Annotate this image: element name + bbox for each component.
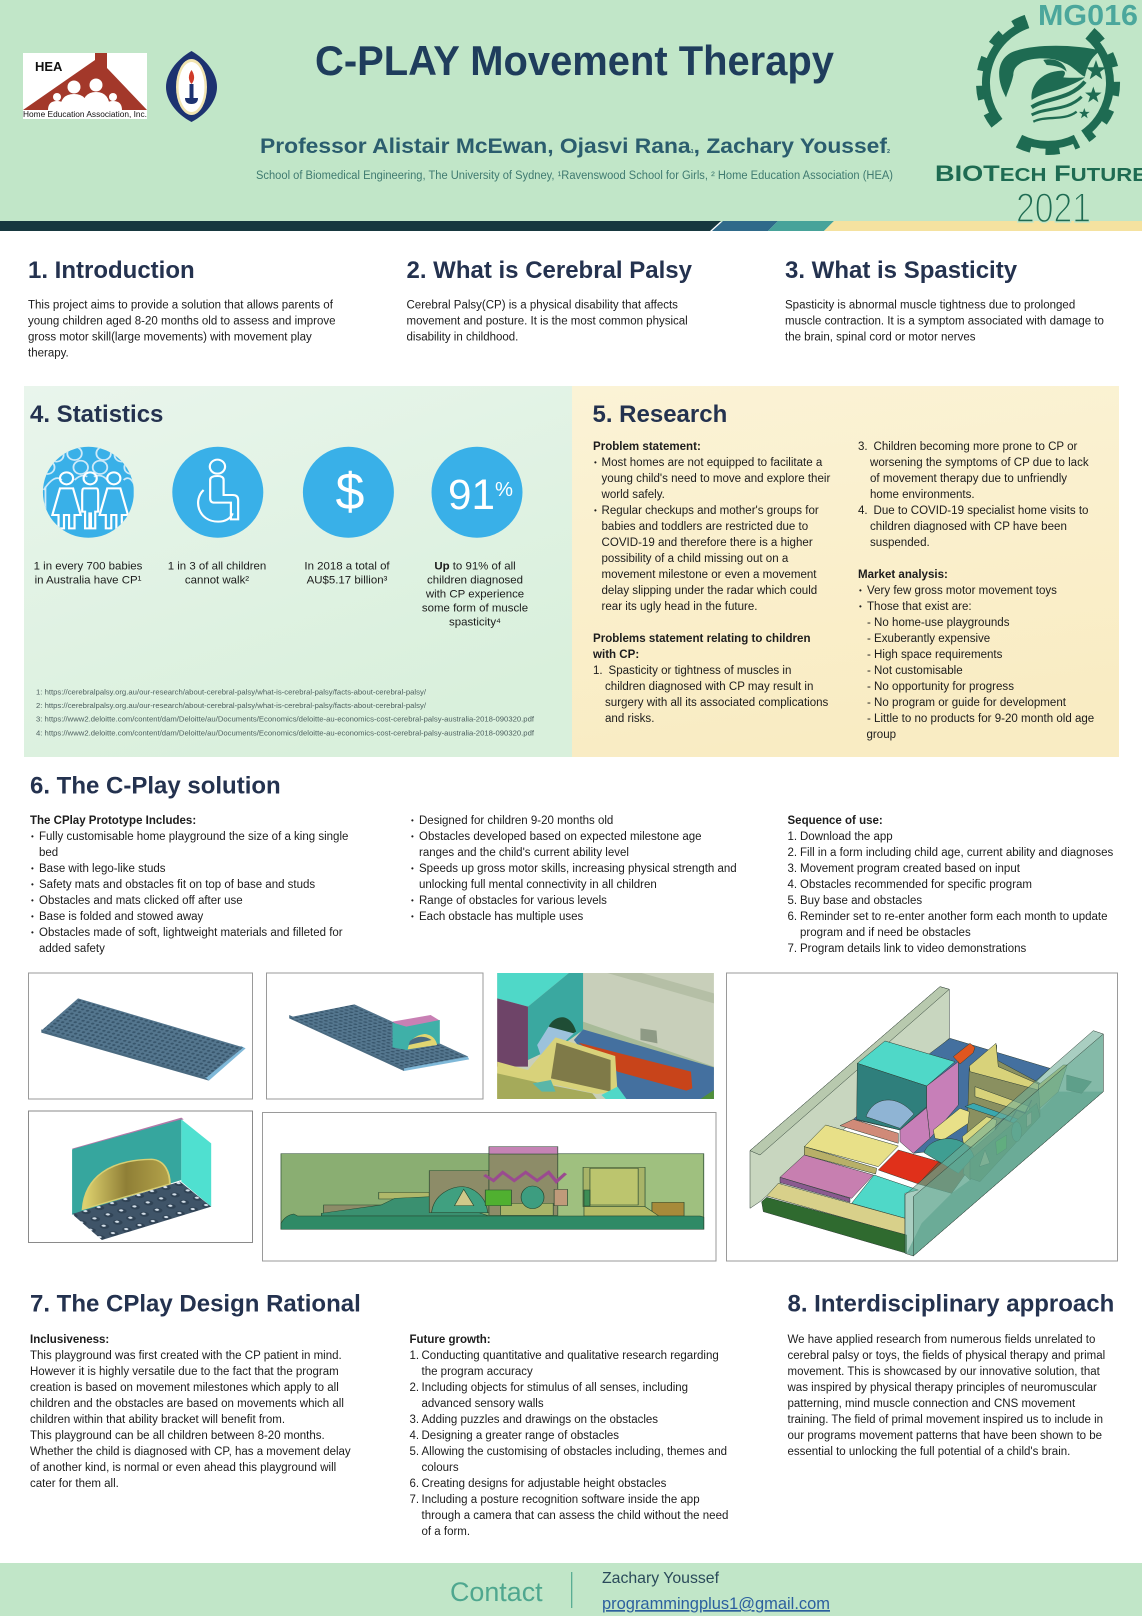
problem statement: Most homes are not equipped to facilitate a <box>602 457 823 469</box>
prototype list: • <box>31 864 34 873</box>
panel: introduction <box>28 257 336 360</box>
design list: Range of obstacles for various levels <box>419 895 607 907</box>
problem statement: world safely. <box>600 489 665 501</box>
text block: our programs movement patterns that have been shown to be <box>788 1430 1102 1442</box>
sequence of use: Download the app <box>800 831 893 843</box>
icon: dollar <box>303 447 394 586</box>
prototype list: added safety <box>39 943 105 955</box>
problems relating to children with CP <box>592 633 829 725</box>
future growth: Including a posture recognition software inside the app <box>422 1494 700 1506</box>
prototype list: Obstacles made of soft, lightweight materials and filleted for <box>39 927 343 939</box>
figure: obstacle underside <box>28 1111 252 1242</box>
panel: statistics <box>24 386 572 757</box>
problem statement: • <box>594 458 597 467</box>
text block: Cerebral Palsy(CP) is a physical disability that affects <box>406 300 678 312</box>
caption: Up to 91% of all <box>434 560 516 572</box>
authors: Professor Alistair McEwan, Ojasvi Rana 1, Zachary Youssef 2 <box>260 135 890 158</box>
inclusiveness: children and the obstacles are based on movements which all <box>30 1398 344 1410</box>
prototype list: • <box>31 880 34 889</box>
text block <box>28 300 336 360</box>
market analysis: - Not customisable <box>867 665 963 677</box>
logo: school crest <box>166 51 217 122</box>
text block: training. The field of primal movement inspired us to include in <box>788 1414 1103 1426</box>
panel: what is cerebral palsy <box>406 257 693 344</box>
references <box>36 690 534 738</box>
problems relating to children with CP: children diagnosed with CP may result in <box>605 681 813 693</box>
design list: • <box>411 864 414 873</box>
text block: Spasticity is abnormal muscle tightness due to prolonged <box>785 300 1075 312</box>
design list: Obstacles developed based on expected milestone age <box>419 831 702 843</box>
prototype list: Obstacles and mats clicked off after use <box>39 895 243 907</box>
caption: with CP experience <box>425 588 524 600</box>
market analysis: • <box>859 602 862 611</box>
logo: Home Education Association: HEA <box>35 59 63 74</box>
future growth: through a camera that can assess the child without the need <box>422 1510 728 1522</box>
design list: Designed for children 9-20 months old <box>419 815 613 827</box>
prototype list: • <box>31 912 34 921</box>
sequence of use: 5. <box>788 895 797 907</box>
problem statement: babies and toddlers are restricted due to <box>602 521 808 533</box>
inclusiveness: of another kind, is normal or even ahead this playground will <box>30 1462 336 1474</box>
market analysis: Very few gross motor movement toys <box>867 585 1057 597</box>
inclusiveness: This playground can be all children between 8-20 months. <box>30 1430 325 1442</box>
text block <box>786 1334 1105 1458</box>
heading: 4. Statistics <box>30 401 163 428</box>
caption <box>304 560 390 586</box>
sequence of use: Fill in a form including child age, current ability and diagnoses <box>800 847 1113 859</box>
market analysis: group <box>866 729 896 741</box>
text block: cerebral palsy or toys, the fields of physical therapy and primal <box>788 1350 1105 1362</box>
text block: young children aged 8-20 months old to assess and improve <box>28 316 336 328</box>
sequence of use: Buy base and obstacles <box>800 895 922 907</box>
sequence of use: Sequence of use: <box>788 815 883 827</box>
panel: the C-Play solution <box>30 772 1113 955</box>
heading: 3. What is Spasticity <box>785 257 1018 284</box>
problems continued: home environments. <box>870 489 975 501</box>
market analysis: Those that exist are: <box>867 601 972 613</box>
caption: AU$5.17 billion³ <box>307 574 388 586</box>
caption: in Australia have CP¹ <box>35 574 142 586</box>
problems relating to children with CP: Problems statement relating to children <box>593 633 811 645</box>
problem statement: Regular checkups and mother's groups for <box>602 505 819 517</box>
heading: 5. Research <box>592 401 727 428</box>
figure: full playground isometric view <box>726 973 1118 1261</box>
icon: dollar: $ <box>336 463 365 521</box>
future growth <box>410 1334 728 1538</box>
problem statement <box>593 441 830 613</box>
sequence of use: Reminder set to re-enter another form each month to update <box>800 911 1107 923</box>
sequence of use: 4. <box>788 879 797 891</box>
future growth: of a form. <box>422 1526 470 1538</box>
references: 4: https://www2.deloitte.com/content/dam/Deloitte/au/Documents/Economics/deloitte-au-economics-cost-cerebral-palsy-australia-2018-090320.pdf <box>36 730 534 738</box>
contact email: programmingplus1@gmail.com <box>602 1594 830 1613</box>
design list: • <box>411 896 414 905</box>
text block: the brain, spinal cord or motor nerves <box>785 332 976 344</box>
market analysis: Market analysis: <box>858 569 948 581</box>
caption: In 2018 a total of <box>304 560 390 572</box>
problem statement: movement milestone or even a movement <box>602 569 817 581</box>
problems continued <box>858 441 1089 549</box>
future growth: Conducting quantitative and qualitative research regarding <box>422 1350 719 1362</box>
sequence of use: 3. <box>788 863 797 875</box>
problems relating to children with CP: 1. <box>593 665 603 677</box>
problem statement: COVID-19 and therefore there is a higher <box>602 537 813 549</box>
caption: 1 in every 700 babies <box>34 560 143 572</box>
problem statement: • <box>594 506 597 515</box>
design list: Each obstacle has multiple uses <box>419 911 584 923</box>
icon: crowd of people <box>34 447 143 586</box>
problems continued: of movement therapy due to unfriendly <box>870 473 1067 485</box>
problem statement: Problem statement: <box>593 441 701 453</box>
figure: studded base <box>28 973 252 1099</box>
contact footer <box>0 1563 1142 1616</box>
market analysis: - Little to no products for 9-20 month old age <box>867 713 1094 725</box>
icon: wheelchair <box>168 447 266 586</box>
logo: BIOTech Future 2021 <box>935 0 1142 231</box>
caption: some form of muscle <box>422 602 528 614</box>
text block: was inspired by physical therapy principles of neuromuscular <box>786 1382 1097 1394</box>
caption: cannot walk² <box>185 574 249 586</box>
problems continued: Due to COVID-19 specialist home visits to <box>874 505 1088 517</box>
problems continued: 3. <box>858 441 868 453</box>
contact label: Contact <box>450 1577 543 1607</box>
sequence of use: Obstacles recommended for specific program <box>800 879 1032 891</box>
problems continued: 4. <box>858 505 868 517</box>
prototype list: Safety mats and obstacles fit on top of base and studs <box>39 879 315 891</box>
panel: research <box>572 386 1119 757</box>
text block: disability in childhood. <box>406 332 518 344</box>
text block: gross motor skill(large movements) with movement play <box>28 332 312 344</box>
contact name: Zachary Youssef <box>602 1570 720 1587</box>
sequence of use: 6. <box>788 911 797 923</box>
prototype list: • <box>31 832 34 841</box>
text block <box>785 300 1104 344</box>
design list: • <box>411 816 414 825</box>
caption: children diagnosed <box>427 574 523 586</box>
future growth: 1. <box>410 1350 419 1362</box>
future growth: the program accuracy <box>422 1366 533 1378</box>
prototype list: bed <box>39 847 58 859</box>
prototype list <box>30 815 348 955</box>
references: 3: https://www2.deloitte.com/content/dam/Deloitte/au/Documents/Economics/deloitte-au-economics-cost-cerebral-palsy-australia-2018-090320.pdf <box>36 716 534 724</box>
future growth: 2. <box>410 1382 419 1394</box>
future growth: 6. <box>410 1478 419 1490</box>
prototype list: Fully customisable home playground the size of a king single <box>39 831 348 843</box>
market analysis: - No home-use playgrounds <box>867 617 1010 629</box>
problem statement: young child's need to move and explore their <box>602 473 830 485</box>
future growth: Creating designs for adjustable height obstacles <box>422 1478 667 1490</box>
problem statement: rear its ugly head in the future. <box>602 601 757 613</box>
prototype list: Base with lego-like studs <box>39 863 166 875</box>
design list <box>411 815 737 923</box>
icon: 91 percent: % <box>495 479 513 501</box>
booth number: MG016 <box>1038 0 1138 32</box>
problems relating to children with CP: and risks. <box>605 713 654 725</box>
future growth: Future growth: <box>410 1334 491 1346</box>
future growth: colours <box>422 1462 459 1474</box>
market analysis <box>858 569 1094 741</box>
figure: close-up of obstacles <box>497 973 714 1099</box>
problems continued: Children becoming more prone to CP or <box>874 441 1078 453</box>
text block: essential to unlocking the full potential of a child's brain. <box>788 1446 1070 1458</box>
heading: 1. Introduction <box>28 257 195 284</box>
prototype list: Base is folded and stowed away <box>39 911 204 923</box>
design list: unlocking full mental connectivity in all children <box>419 879 657 891</box>
heading: 2. What is Cerebral Palsy <box>406 257 693 284</box>
panel: interdisciplinary approach <box>786 1291 1114 1458</box>
figure: side view of playground <box>262 1112 716 1261</box>
problems relating to children with CP: with CP: <box>592 649 639 661</box>
design list: Speeds up gross motor skills, increasing physical strength and <box>419 863 737 875</box>
sequence of use: 2. <box>788 847 797 859</box>
sequence of use: Movement program created based on input <box>800 863 1021 875</box>
market analysis: - Exuberantly expensive <box>867 633 990 645</box>
inclusiveness: Inclusiveness: <box>30 1334 109 1346</box>
heading: 7. The CPlay Design Rational <box>30 1291 361 1318</box>
icon: 91 percent: 91 <box>448 471 495 519</box>
inclusiveness: cater for them all. <box>30 1478 119 1490</box>
future growth: Designing a greater range of obstacles <box>422 1430 619 1442</box>
problems continued: worsening the symptoms of CP due to lack <box>869 457 1089 469</box>
problem statement: possibility of a child missing out on a <box>602 553 789 565</box>
design list: • <box>411 832 414 841</box>
problems continued: children diagnosed with CP have been <box>870 521 1067 533</box>
inclusiveness: This playground was first created with the CP patient in mind. <box>30 1350 342 1362</box>
future growth: 5. <box>410 1446 419 1458</box>
prototype list: • <box>31 896 34 905</box>
caption <box>34 560 143 586</box>
caption <box>168 560 266 586</box>
market analysis: - No opportunity for progress <box>867 681 1014 693</box>
text block: muscle contraction. It is a symptom associated with damage to <box>785 316 1104 328</box>
inclusiveness <box>30 1334 351 1490</box>
market analysis: - High space requirements <box>867 649 1003 661</box>
header divider bar <box>0 221 1142 231</box>
text block: This project aims to provide a solution that allows parents of <box>28 300 334 312</box>
sequence of use <box>788 815 1113 955</box>
references: 2: https://cerebralpalsy.org.au/our-research/about-cerebral-palsy/what-is-cerebral-palsy/facts-about-cerebral-palsy/ <box>36 703 426 710</box>
icon: 91 percent <box>422 447 528 628</box>
problem statement: delay slipping under the radar which could <box>602 585 817 597</box>
event name: BIOT ECH F UTURE <box>935 161 1142 186</box>
icon: eagle and stars <box>999 46 1106 122</box>
problems relating to children with CP: Spasticity or tightness of muscles in <box>608 665 791 677</box>
market analysis: • <box>859 586 862 595</box>
sequence of use: Program details link to video demonstrations <box>800 943 1027 955</box>
heading: 6. The C-Play solution <box>30 772 281 800</box>
text block: movement and posture. It is the most common physical <box>406 316 688 328</box>
inclusiveness: creation is based on movement milestones which apply to all <box>30 1382 339 1394</box>
future growth: Adding puzzles and drawings on the obstacles <box>422 1414 658 1426</box>
inclusiveness: However it is highly versatile due to the fact that the program <box>30 1366 339 1378</box>
future growth: Allowing the customising of obstacles including, themes and <box>422 1446 727 1458</box>
panel: what is spasticity <box>785 257 1104 344</box>
event year: 2021 <box>1016 184 1091 231</box>
heading: 8. Interdisciplinary approach <box>788 1291 1114 1318</box>
sequence of use: 1. <box>788 831 797 843</box>
caption: spasticity⁴ <box>449 616 501 628</box>
problems continued: suspended. <box>870 537 930 549</box>
problems relating to children with CP: surgery with all its associated complications <box>605 697 829 709</box>
text block: We have applied research from numerous fields unrelated to <box>788 1334 1095 1346</box>
text block: patterning, mind muscle connection and CNS movement <box>788 1398 1076 1410</box>
design list: ranges and the child's current ability level <box>419 847 629 859</box>
text block: therapy. <box>28 348 69 360</box>
sequence of use: 7. <box>788 943 797 955</box>
future growth: 4. <box>410 1430 419 1442</box>
title: C-PLAY Movement Therapy <box>315 37 835 84</box>
references: 1: https://cerebralpalsy.org.au/our-research/about-cerebral-palsy/what-is-cerebral-palsy/facts-about-cerebral-palsy/ <box>36 690 426 696</box>
figure: base with arch obstacle <box>266 973 483 1099</box>
future growth: Including objects for stimulus of all senses, including <box>422 1382 688 1394</box>
market analysis: - No program or guide for development <box>867 697 1067 709</box>
future growth: 3. <box>410 1414 419 1426</box>
inclusiveness: Whether the child is diagnosed with CP, has a movement delay <box>30 1446 351 1458</box>
text block: movement. This is showcased by our innovative solution, that <box>788 1366 1101 1378</box>
caption: 1 in 3 of all children <box>168 560 266 572</box>
affiliations: School of Biomedical Engineering, The University of Sydney, ¹Ravenswood School for Girls, ² Home Education Association (HEA) <box>256 170 893 182</box>
header band <box>0 0 1142 231</box>
logo: Home Education Association <box>23 53 147 119</box>
sequence of use: program and if need be obstacles <box>800 927 971 939</box>
text block <box>406 300 688 344</box>
prototype list: The CPlay Prototype Includes: <box>30 815 196 827</box>
future growth: advanced sensory walls <box>422 1398 544 1410</box>
panel: design rationale <box>30 1291 728 1538</box>
design list: • <box>411 912 414 921</box>
prototype list: • <box>31 928 34 937</box>
caption <box>422 560 528 628</box>
future growth: 7. <box>410 1494 419 1506</box>
logo: Home Education Association: Home Education Association, Inc. <box>23 110 147 119</box>
icon: gear ring <box>980 19 1116 151</box>
inclusiveness: children within that ability bracket will benefit from. <box>30 1414 285 1426</box>
